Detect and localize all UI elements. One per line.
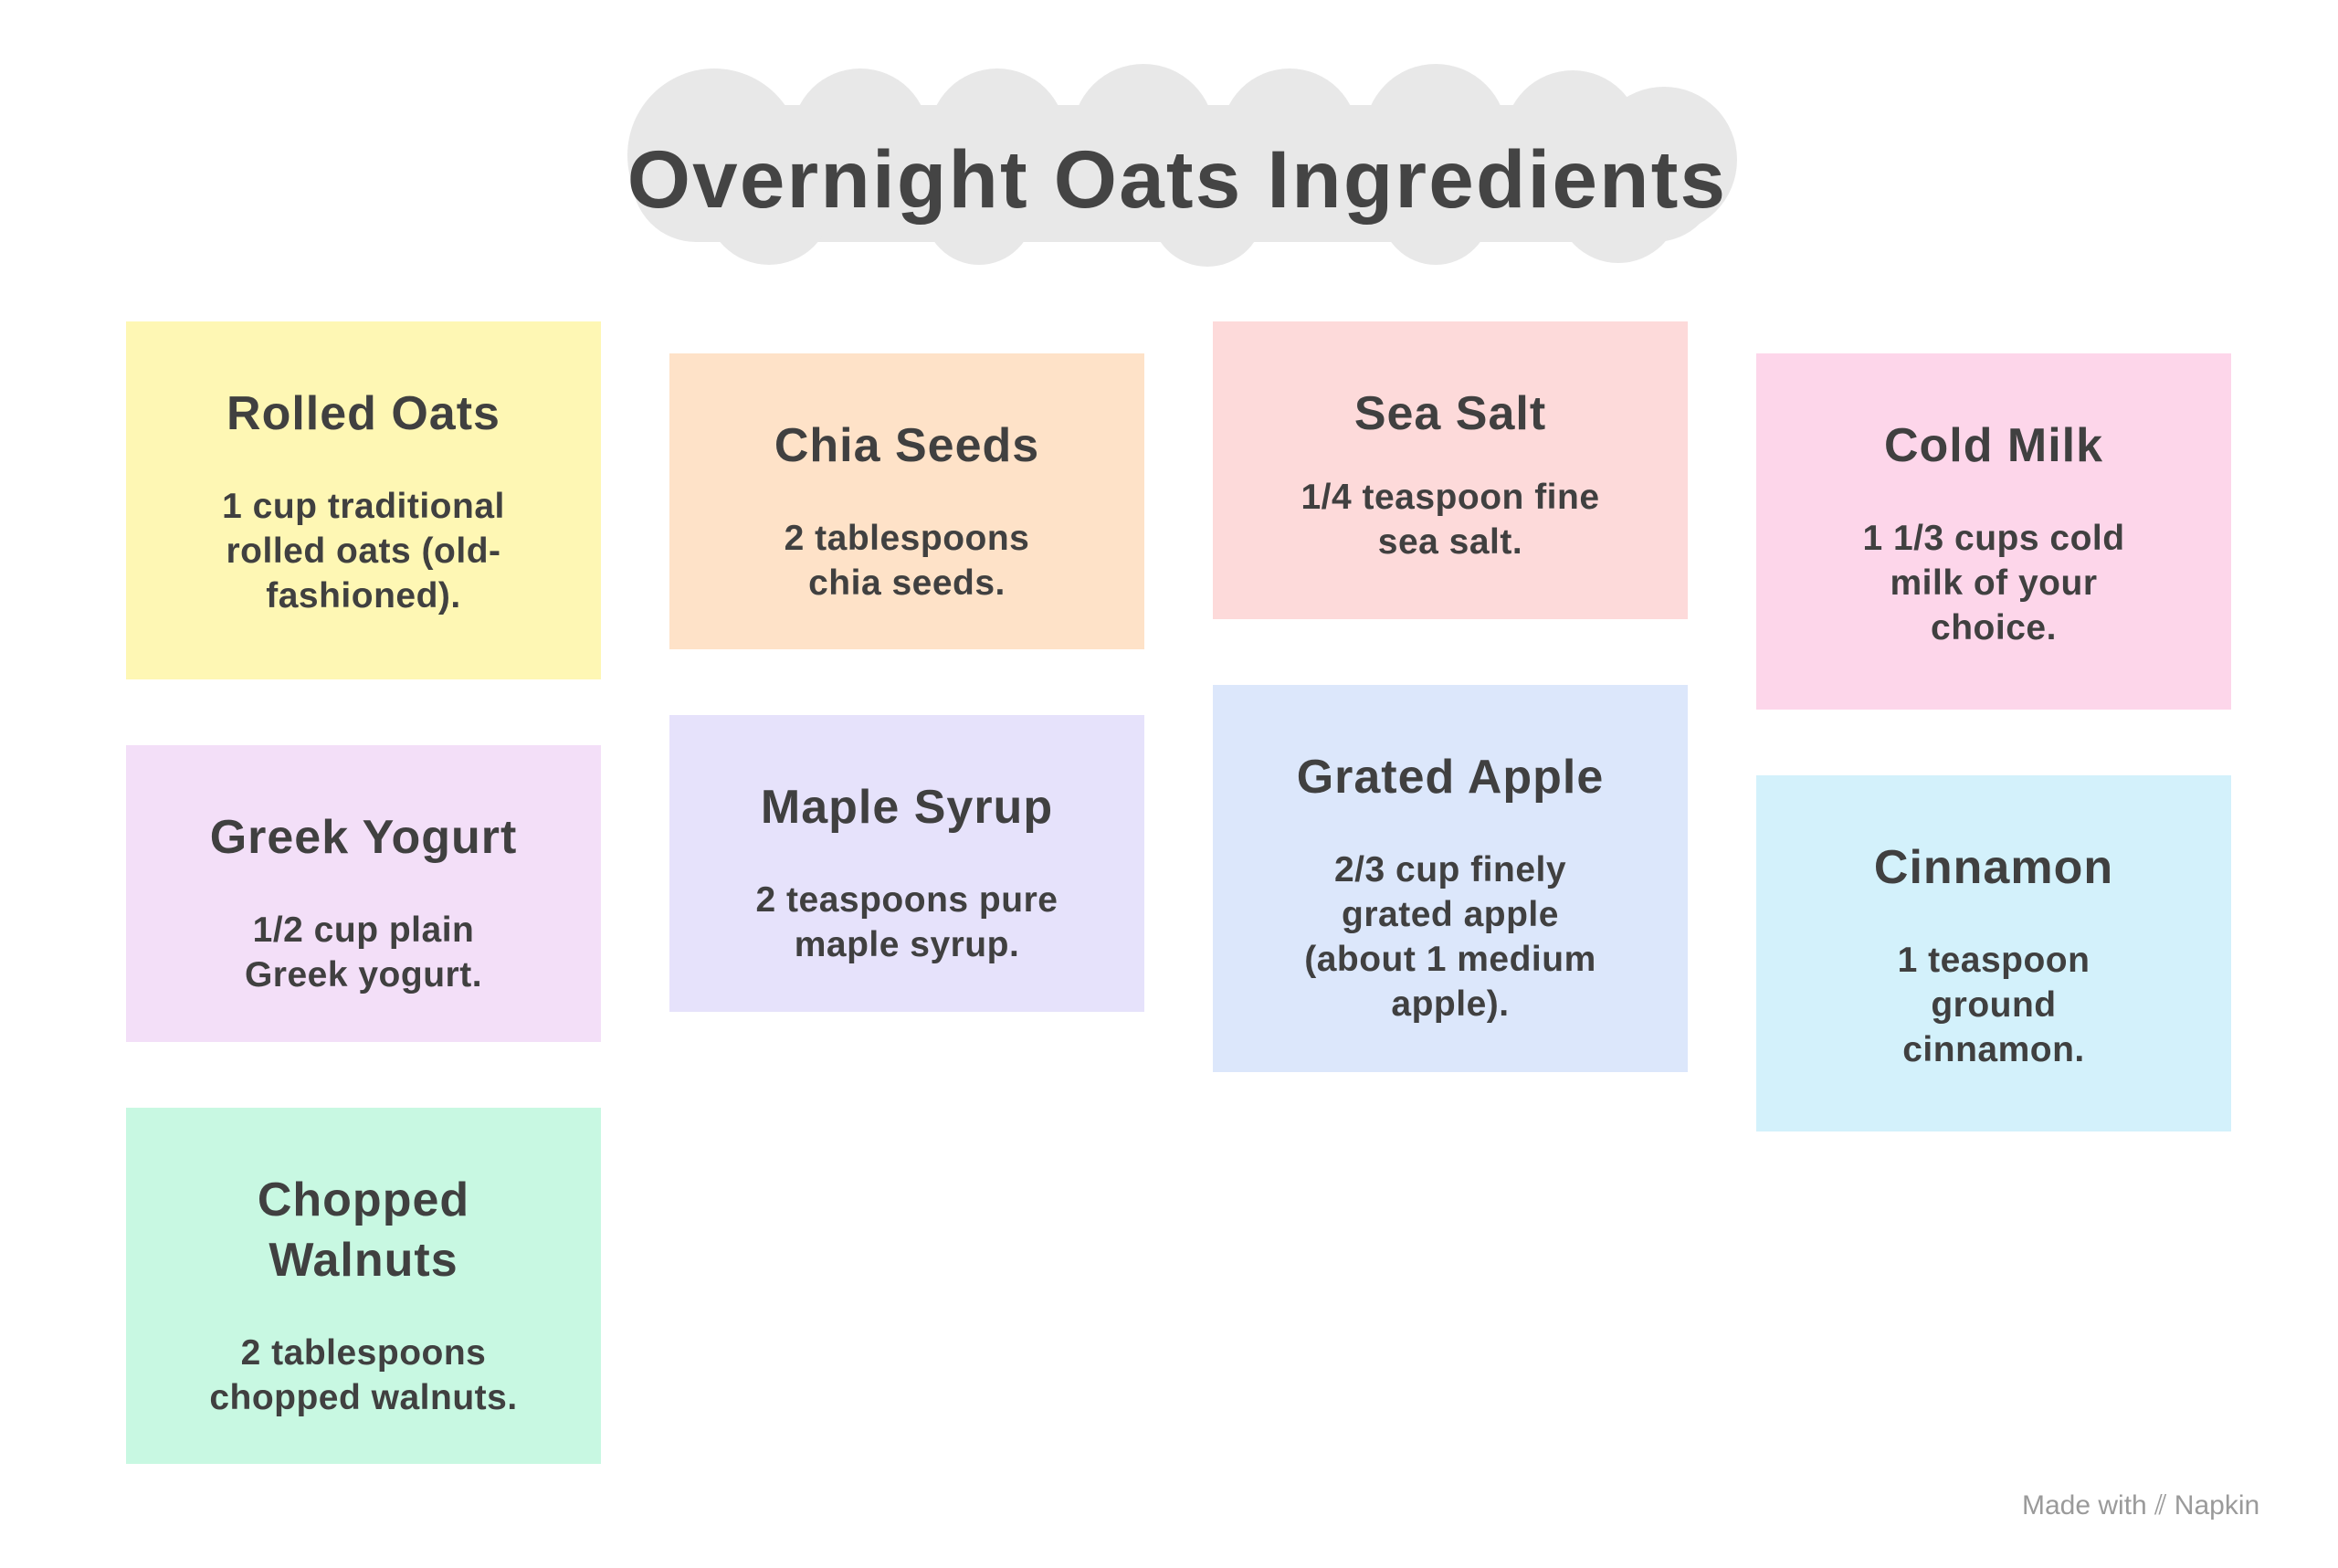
card: cinnamon: [1756, 775, 2231, 1131]
card: chopped walnuts: Walnuts: [269, 1234, 458, 1287]
card: cold milk: [1756, 353, 2231, 710]
card: cinnamon: cinnamon.: [1902, 1030, 2085, 1069]
footer: made with napkin: Made with ⫽ Napkin: [2022, 1490, 2259, 1521]
card: chopped walnuts: [126, 1108, 601, 1464]
card: cold milk: choice.: [1931, 608, 2057, 647]
card: sea salt: sea salt.: [1378, 522, 1522, 562]
card: chia seeds: Chia Seeds: [774, 419, 1039, 472]
card: greek yogurt: Greek Yogurt: [210, 811, 517, 864]
card: grated apple: apple).: [1391, 984, 1510, 1024]
card: chopped walnuts: chopped walnuts.: [209, 1378, 518, 1417]
card: chopped walnuts: 2 tablespoons: [241, 1333, 486, 1373]
card: grated apple: Grated Apple: [1297, 751, 1604, 804]
card: grated apple: (about 1 medium: [1304, 940, 1596, 979]
card: chopped walnuts: Chopped: [258, 1173, 469, 1226]
card: chia seeds: chia seeds.: [808, 563, 1006, 603]
card: rolled oats: rolled oats (old-: [226, 531, 500, 571]
card: rolled oats: Rolled Oats: [226, 387, 500, 440]
card: maple syrup: 2 teaspoons pure: [756, 880, 1058, 920]
card: greek yogurt: 1/2 cup plain: [253, 910, 474, 950]
card: rolled oats: fashioned).: [266, 576, 461, 616]
card: grated apple: [1213, 685, 1688, 1072]
card: sea salt: Sea Salt: [1354, 387, 1546, 440]
card: sea salt: 1/4 teaspoon fine: [1301, 478, 1600, 517]
card: maple syrup: [669, 715, 1144, 1012]
card: chia seeds: 2 tablespoons: [785, 519, 1029, 558]
card: rolled oats: [126, 321, 601, 679]
card: greek yogurt: Greek yogurt.: [245, 955, 482, 994]
card: cold milk: 1 1/3 cups cold: [1862, 519, 2125, 558]
card: cinnamon: ground: [1931, 985, 2057, 1025]
title cloud background: [627, 64, 1737, 267]
card: cold milk: Cold Milk: [1884, 419, 2103, 472]
card: sea salt: [1213, 321, 1688, 619]
card: greek yogurt: [126, 745, 601, 1042]
card: grated apple: 2/3 cup finely: [1334, 850, 1566, 889]
card: maple syrup: maple syrup.: [795, 925, 1019, 964]
title: Overnight Oats Ingredients: [627, 133, 1727, 225]
card: cinnamon: Cinnamon: [1874, 841, 2113, 894]
card: cold milk: milk of your: [1890, 563, 2098, 603]
card: grated apple: grated apple: [1342, 895, 1559, 934]
card: maple syrup: Maple Syrup: [761, 781, 1053, 834]
card: cinnamon: 1 teaspoon: [1898, 941, 2090, 980]
card: chia seeds: [669, 353, 1144, 649]
card: rolled oats: 1 cup traditional: [222, 487, 505, 526]
